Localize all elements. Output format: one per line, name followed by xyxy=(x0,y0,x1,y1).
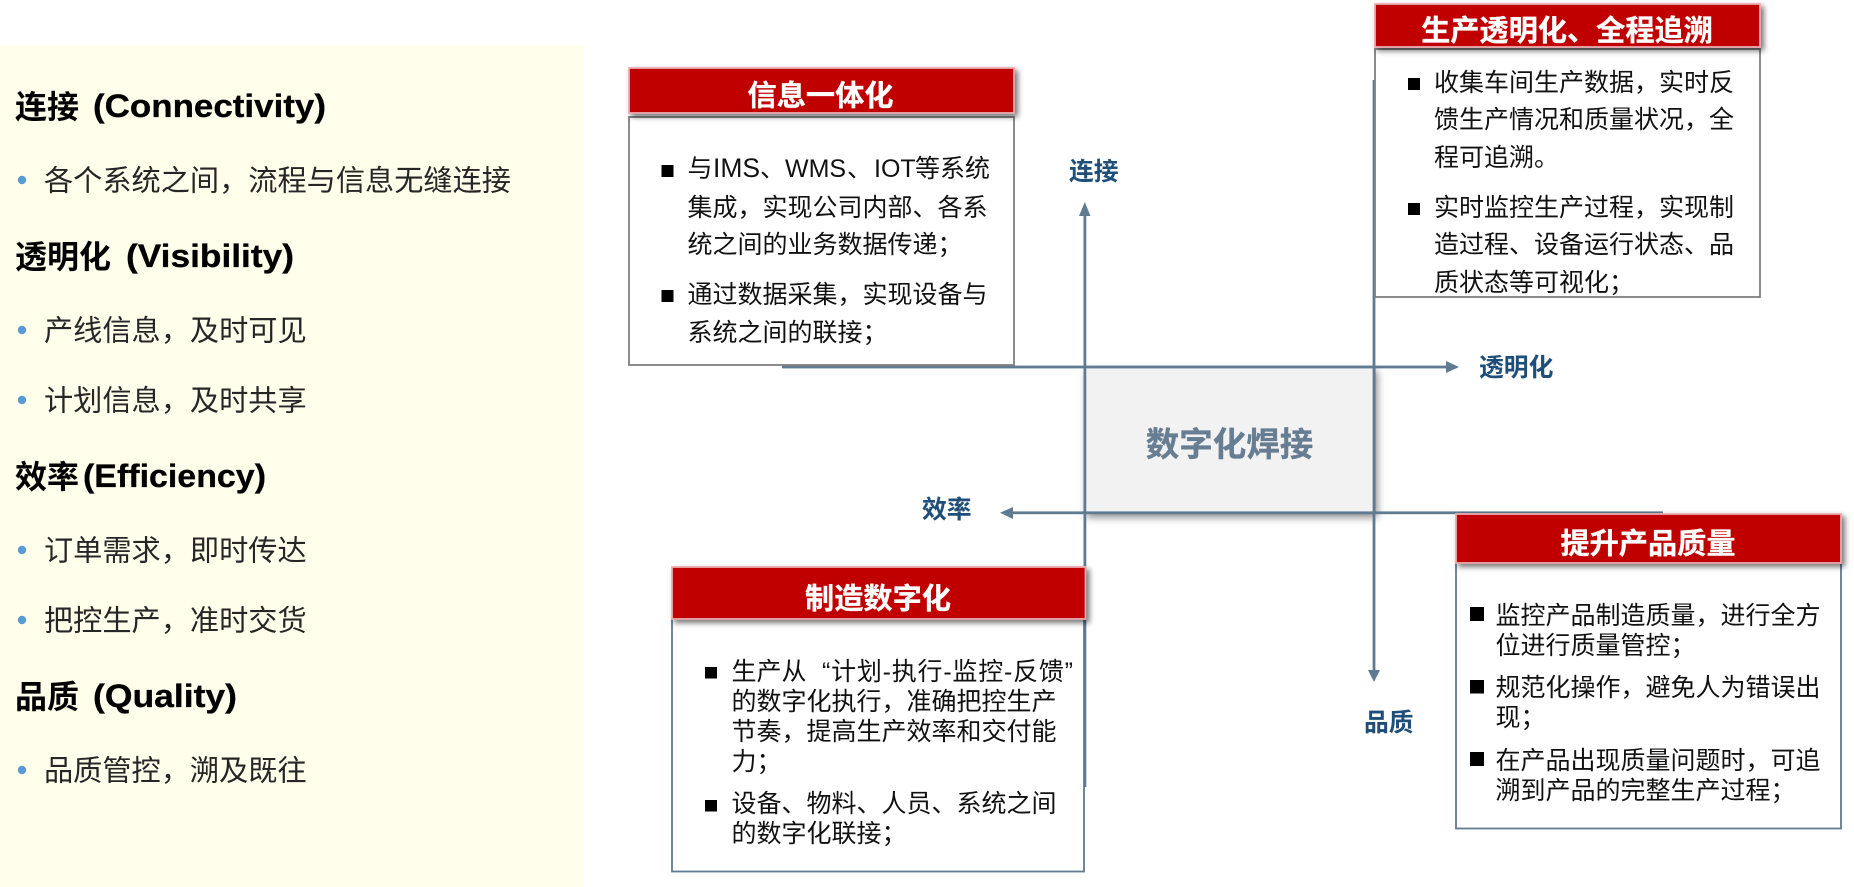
heading: quality: (Quality) xyxy=(93,678,237,714)
heading: connectivity: (Connectivity) xyxy=(93,88,326,124)
list: product quality: 在产品出现质量问题时，可追 xyxy=(1496,747,1821,775)
list: product quality: 监控产品制造质量，进行全方 xyxy=(1496,602,1821,630)
center box: digital welding: 数字化焊接 xyxy=(1146,427,1313,464)
axis label: quality: 品质 xyxy=(1364,709,1414,737)
list: information integration xyxy=(662,153,990,347)
list: manufacturing digitalization: 力； xyxy=(732,748,782,776)
heading: quality: 品质 xyxy=(15,679,79,715)
list: information integration: IOT xyxy=(874,155,916,183)
list: manufacturing digitalization: 的数字化执行，准确把控生产 xyxy=(732,688,1057,716)
header: information integration xyxy=(629,68,1014,113)
panel: production transparency xyxy=(1375,4,1760,297)
bullet: quality control: 品质管控，溯及既往 xyxy=(44,754,307,788)
header: production transparency: 生产透明化、全程追溯 xyxy=(1421,14,1713,48)
heading: quality xyxy=(15,678,237,715)
list: production transparency: 实时监控生产过程，实现制 xyxy=(1434,194,1734,222)
center box: digital welding xyxy=(1085,367,1375,513)
axis arrow: visibility right xyxy=(782,361,1459,373)
panel: definitions xyxy=(0,45,584,887)
header: production transparency xyxy=(1375,4,1760,48)
list: production transparency: 程可追溯。 xyxy=(1434,144,1559,172)
panel: product quality xyxy=(1456,514,1841,828)
list: information integration: WMS xyxy=(785,155,846,183)
list: production transparency: 造过程、设备运行状态、品 xyxy=(1434,231,1734,259)
list: information integration: IMS xyxy=(713,153,760,183)
axis arrow: quality down xyxy=(1368,80,1380,682)
list: production transparency: 馈生产情况和质量状况，全 xyxy=(1434,106,1734,134)
list: information integration: 、 xyxy=(847,155,872,183)
heading: efficiency: 效率 xyxy=(15,459,79,495)
list: production transparency: 质状态等可视化； xyxy=(1434,269,1634,297)
list: information integration: 系统之间的联接； xyxy=(688,319,888,347)
bullet: plan info: 计划信息，及时共享 xyxy=(44,384,307,418)
list: product quality: 溯到产品的完整生产过程； xyxy=(1496,777,1796,805)
list: manufacturing digitalization: 设备、物料、人员、系统之间 xyxy=(732,790,1057,818)
list: product quality: 位进行质量管控； xyxy=(1496,632,1696,660)
header: manufacturing digitalization xyxy=(672,567,1086,619)
list: manufacturing digitalization: 的数字化联接； xyxy=(732,820,907,848)
bullet: production control: 把控生产，准时交货 xyxy=(44,604,307,638)
bullet: connectivity: 各个系统之间，流程与信息无缝连接 xyxy=(44,164,511,198)
list: information integration: 、 xyxy=(760,155,785,183)
list: product quality: 规范化操作，避免人为错误出 xyxy=(1496,674,1821,702)
list: product quality xyxy=(1470,602,1821,805)
list: production transparency: 收集车间生产数据，实时反 xyxy=(1434,69,1734,97)
bullet: production line info: 产线信息，及时可见 xyxy=(44,314,307,348)
axis label: connectivity: 连接 xyxy=(1069,158,1119,186)
axis label: visibility: 透明化 xyxy=(1479,354,1554,382)
heading: connectivity xyxy=(15,88,326,125)
list: information integration: 统之间的业务数据传递； xyxy=(688,231,963,259)
list: production transparency xyxy=(1408,69,1734,297)
header: product quality: 提升产品质量 xyxy=(1560,528,1736,560)
list: manufacturing digitalization xyxy=(705,658,1073,848)
header: information integration: 信息一体化 xyxy=(748,80,893,112)
bullet: order demand: 订单需求，即时传达 xyxy=(44,534,307,568)
list: information integration: 等系统 xyxy=(915,155,990,183)
list: information integration: 集成，实现公司内部、各系 xyxy=(688,194,988,222)
heading: visibility: 透明化 xyxy=(15,239,111,275)
axis arrow: efficiency left xyxy=(1000,507,1663,519)
header: manufacturing digitalization: 制造数字化 xyxy=(805,582,951,616)
panel: information integration xyxy=(629,68,1014,365)
heading: visibility: (Visibility) xyxy=(126,238,294,274)
list: manufacturing digitalization: 节奏，提高生产效率和交付能 xyxy=(732,718,1057,746)
heading: visibility xyxy=(15,238,294,275)
heading: connectivity: 连接 xyxy=(15,89,79,125)
list: information integration: 通过数据采集，实现设备与 xyxy=(688,281,988,309)
panel: manufacturing digitalization xyxy=(672,567,1086,872)
axis arrow: connectivity up xyxy=(1079,202,1090,787)
list: product quality: 现； xyxy=(1496,704,1546,732)
list: information integration: 与 xyxy=(688,155,713,183)
heading: efficiency xyxy=(15,458,266,495)
header: product quality xyxy=(1456,514,1841,563)
axis label: efficiency: 效率 xyxy=(922,496,972,524)
heading: efficiency: (Efficiency) xyxy=(83,458,266,494)
list: manufacturing digitalization: “计划-执行-监控-反馈” xyxy=(822,658,1073,686)
list: manufacturing digitalization: 生产从 xyxy=(732,658,807,686)
